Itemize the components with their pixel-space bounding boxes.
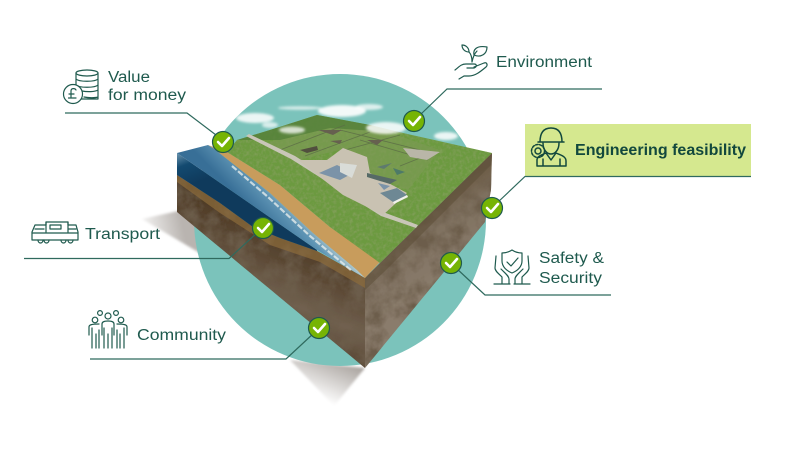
grass top xyxy=(227,115,492,263)
connector: community xyxy=(90,333,314,359)
ground shadow bottom xyxy=(290,360,365,406)
check badge: safety and security xyxy=(440,252,462,274)
highlight panel: engineering feasibility xyxy=(525,124,751,176)
sea surface xyxy=(177,145,365,278)
icon: coins xyxy=(64,70,98,104)
connector: environment xyxy=(420,89,602,115)
clouds xyxy=(236,104,458,140)
right face top shading xyxy=(365,153,492,290)
ground shadow left xyxy=(142,211,215,262)
connector: engineering feasibility xyxy=(497,176,751,203)
label: engineering feasibility: Engineering feasibility xyxy=(575,142,746,159)
label: safety and security: Safety & xyxy=(539,250,605,267)
label: community: Community xyxy=(137,327,226,344)
label: value for money: Value xyxy=(108,69,150,86)
connector: transport xyxy=(24,232,258,258)
icon: engineer xyxy=(532,128,566,166)
beach xyxy=(208,145,380,278)
icon: community xyxy=(89,311,127,348)
back fields xyxy=(266,116,440,190)
connector: value for money xyxy=(65,113,216,135)
label: value for money: for money xyxy=(108,87,186,104)
teal circle backdrop xyxy=(194,74,486,366)
right soil face xyxy=(365,153,492,368)
connector: safety and security xyxy=(456,268,611,295)
gravel pad xyxy=(403,148,440,160)
label: safety and security xyxy=(539,250,605,287)
site road xyxy=(246,134,418,228)
check badge: engineering feasibility xyxy=(482,198,502,218)
label: value for money xyxy=(108,69,186,104)
icon: train xyxy=(32,222,78,243)
field grid lines xyxy=(280,125,428,166)
check badge: value for money xyxy=(212,132,234,152)
check badge: community xyxy=(308,318,330,338)
icon: plant in hand xyxy=(455,45,487,79)
soil top band xyxy=(177,175,365,288)
site concrete yard xyxy=(298,148,407,215)
buildings xyxy=(319,165,353,180)
label: safety and security: Security xyxy=(539,270,602,287)
foreground clouds over ridge xyxy=(279,122,406,134)
left soil face xyxy=(177,175,365,368)
sea cross-section xyxy=(177,153,317,251)
terrain block xyxy=(177,115,492,368)
label: transport: Transport xyxy=(85,226,161,243)
icon: shield in hands xyxy=(494,250,530,284)
label: environment: Environment xyxy=(496,54,593,71)
check badge: environment xyxy=(404,110,424,132)
check badge: transport xyxy=(252,218,274,238)
surf foam xyxy=(232,166,352,271)
